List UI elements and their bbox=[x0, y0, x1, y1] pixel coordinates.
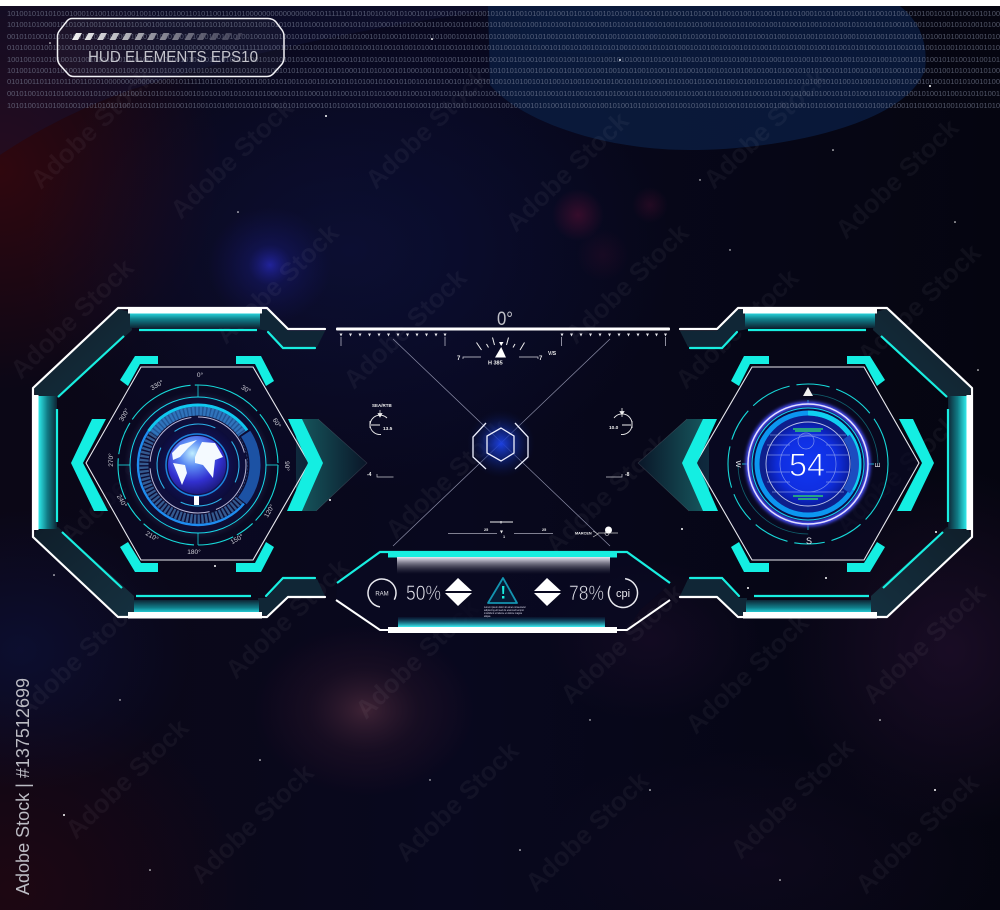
watermarks: Adobe Stock bbox=[359, 62, 495, 195]
bottom scales: 25 bbox=[542, 528, 546, 532]
diamond bbox=[445, 578, 472, 606]
watermarks: Adobe Stock bbox=[856, 577, 992, 710]
panel: centre display bbox=[336, 309, 670, 546]
watermarks: Adobe Stock bbox=[184, 757, 320, 890]
warning note: adipiscing elit sed do eiusmod tempor bbox=[484, 609, 524, 612]
binary code background text: 1010010101010101000101001010100100101010100110101100110101000000000000000001011111101101001010010100101010010100101001010101001010010100101010100101010010100101010010101001010010100101001010101000101010010100101001010010101001010101001010100 bbox=[7, 9, 1000, 18]
warning note bbox=[484, 606, 526, 618]
watermarks: Adobe Stock bbox=[54, 417, 190, 550]
teal wedge bbox=[296, 419, 367, 511]
vertical speed indicator: 7 bbox=[539, 356, 543, 362]
warning note: Lorem ipsum dolor sit amet consectetur bbox=[484, 606, 526, 609]
bottom scales: 1 bbox=[503, 535, 505, 539]
marker scale bbox=[575, 526, 618, 537]
watermarks: Adobe Stock bbox=[219, 552, 355, 685]
title text: HUD ELEMENTS EPS10 bbox=[88, 49, 258, 66]
segmented rings bbox=[138, 405, 258, 525]
warning note: aliqua bbox=[484, 615, 491, 618]
watermarks: Adobe Stock bbox=[59, 712, 195, 845]
degree labels: 240° bbox=[115, 493, 129, 509]
heading scale bbox=[336, 328, 670, 330]
watermarks: Adobe Stock bbox=[4, 252, 140, 385]
watermarks: Adobe Stock bbox=[829, 407, 965, 540]
watermarks: Adobe Stock bbox=[349, 592, 485, 725]
watermarks: Adobe Stock bbox=[539, 427, 675, 560]
binary code background text: 0010101001010101001010101010001010101000110101010100101010010010101001010101001010010100101010010101010101000101010010101000101010100101010010010100101010100010100101010010100101010100101001010100101010100010101001010100101010010100101001010 bbox=[7, 32, 1000, 41]
cyan brackets and chevrons bbox=[71, 356, 323, 572]
core glow bbox=[467, 410, 535, 478]
panel: right HUD frame (mirrored) bbox=[638, 307, 973, 618]
crosshair lines bbox=[393, 339, 610, 546]
panel: centre display: -8 bbox=[625, 472, 630, 478]
binary code background text: 1010010100101010010101001010100100101010100101010100101010100101001010101010010101000101010100101000100101010010101001010101010010100101010010100100101010010100101010010100101010100101001010010101010010101001010010100101010010100101010010100 bbox=[7, 66, 1000, 75]
watermarks: Adobe Stock bbox=[164, 92, 300, 225]
watermarks: Adobe Stock bbox=[337, 262, 473, 395]
RAM gauge: RAM bbox=[375, 592, 389, 598]
diamond bbox=[534, 578, 561, 606]
warning note: incididunt ut labore et dolore magna bbox=[484, 612, 523, 615]
binary code background text: 1010010100001010100100101010101010010010101001010101001010101001010101010100101010010101010001010100010101001010100101010010101001010100101010010010101010100101001010101001010101010010100101001010010101001010101010100101001010100101010010100 bbox=[7, 20, 1000, 29]
watermarks: Adobe Stock bbox=[519, 765, 655, 898]
gauge: world globe dial bbox=[107, 371, 291, 556]
panel: centre display: -4 bbox=[367, 472, 372, 478]
watermarks: Adobe Stock bbox=[389, 735, 525, 868]
binary code background text: 1001001010101001010010101010101010010101001010100101010010100101010101010001010100010101010010101010100010100110101010010101010010100101001010101001010100101010010100101010010101001010100010101001010010100101010100101001010100101010010100101 bbox=[7, 55, 1000, 64]
binary code background text: 0010100101010100101010101001010010101010101001010101001010101010001010101000101010010101010100010100101001010101001010010101010010100101010010100101001010101010001010100101010100101001010100101001010010101010010101001010010100101001010101001 bbox=[7, 89, 1000, 98]
binary code background text: 0101001101101011001101010000000000000000010111111011010010010100101010010100101001010101001010010100101010100101010010100101010010101001010010100101001010101000101010010100101001010010101001010101001010100101001010100101001010010101010010100 bbox=[7, 77, 1000, 86]
watermarks: Adobe Stock bbox=[9, 592, 145, 725]
cardinal points bbox=[734, 387, 882, 546]
CPI gauge: cpi bbox=[616, 588, 630, 600]
vertical speed indicator: H 385 bbox=[488, 360, 503, 366]
left mini gauge bbox=[370, 403, 393, 435]
gauge: speed compass dial bbox=[728, 384, 888, 546]
watermarks: Adobe Stock bbox=[24, 62, 160, 195]
bottom scales bbox=[448, 521, 553, 539]
cardinal points: S bbox=[806, 536, 812, 546]
side scales bbox=[377, 474, 622, 477]
degree labels: 120° bbox=[262, 503, 276, 519]
degree labels: 90° bbox=[283, 461, 291, 471]
degree labels: 330° bbox=[149, 378, 165, 392]
RAM gauge bbox=[366, 577, 398, 609]
marker scale: MARCEN bbox=[575, 532, 592, 536]
warning icon bbox=[488, 578, 517, 603]
watermarks: Adobe Stock bbox=[559, 217, 695, 350]
right mini gauge bbox=[609, 408, 632, 435]
compass inner disc bbox=[766, 422, 850, 506]
left mini gauge: 13.5 bbox=[383, 426, 393, 432]
degree labels: 270° bbox=[107, 453, 115, 467]
cardinal points: E bbox=[873, 462, 882, 468]
panel: bottom status bar bbox=[336, 551, 670, 633]
needle marker bbox=[194, 496, 199, 505]
binary code background text: 1010100101010010010101010101001010101010100101001010100101010101001010101000101010100101000100101001001010101010100101010010100101010010101001010010100101010100101001010010101001010100101001010010101001010100101001010010101001010010100101010 bbox=[7, 101, 1000, 110]
degree labels bbox=[107, 371, 291, 556]
degree labels: 300° bbox=[117, 407, 131, 423]
hexagon outline bbox=[86, 367, 309, 560]
left mini gauge: SEA/RTB bbox=[372, 403, 393, 408]
progress slashes bbox=[72, 33, 242, 40]
top white strip bbox=[0, 0, 1000, 6]
watermarks: Adobe Stock bbox=[379, 412, 515, 545]
right mini gauge: 10.0 bbox=[609, 425, 619, 431]
degree labels: 0° bbox=[197, 371, 204, 379]
watermarks: Adobe Stock bbox=[849, 767, 985, 900]
speed readout: 54 bbox=[789, 447, 825, 483]
watermarks: Adobe Stock bbox=[499, 105, 635, 238]
panel: centre display: 0° bbox=[497, 309, 513, 330]
globe bbox=[166, 434, 228, 496]
degree labels: 180° bbox=[187, 548, 201, 556]
panel: left HUD frame bbox=[32, 307, 367, 618]
stock id side text: Adobe Stock | #137512699 bbox=[13, 678, 33, 895]
title box bbox=[58, 18, 284, 76]
watermarks: Adobe Stock bbox=[829, 112, 965, 245]
vertical speed indicator bbox=[457, 338, 557, 366]
RAM percent: 50% bbox=[406, 582, 441, 605]
watermarks: Adobe Stock bbox=[724, 732, 860, 865]
watermarks: Adobe Stock bbox=[669, 262, 805, 395]
vertical speed indicator: V/S bbox=[548, 351, 557, 357]
cardinal points: W bbox=[734, 460, 743, 468]
vertical speed indicator: 7 bbox=[457, 356, 461, 362]
watermarks: Adobe Stock bbox=[554, 577, 690, 710]
bottom scales: 25 bbox=[484, 528, 488, 532]
watermarks: Adobe Stock bbox=[697, 62, 833, 195]
CPI percent: 78% bbox=[569, 582, 604, 605]
target reticle bbox=[473, 423, 528, 469]
watermarks: Adobe Stock bbox=[851, 237, 987, 370]
watermarks: Adobe Stock bbox=[679, 607, 815, 740]
degree labels: 150° bbox=[229, 532, 245, 546]
watermarks: Adobe Stock bbox=[209, 217, 345, 350]
binary code background text bbox=[7, 9, 1000, 110]
CPI gauge bbox=[606, 576, 640, 610]
degree labels: 30° bbox=[240, 383, 253, 395]
degree labels: 210° bbox=[144, 529, 160, 543]
degree labels: 60° bbox=[271, 417, 283, 430]
binary code background text: 0101001010010100101010100110101001010010101000000000000011111110100101001010010101001010010100101001010010100101010010101001010101001010010100101010100101001010101000101010010100101010010101010010100101001010100101010010101001010010101001010 bbox=[7, 43, 1000, 52]
